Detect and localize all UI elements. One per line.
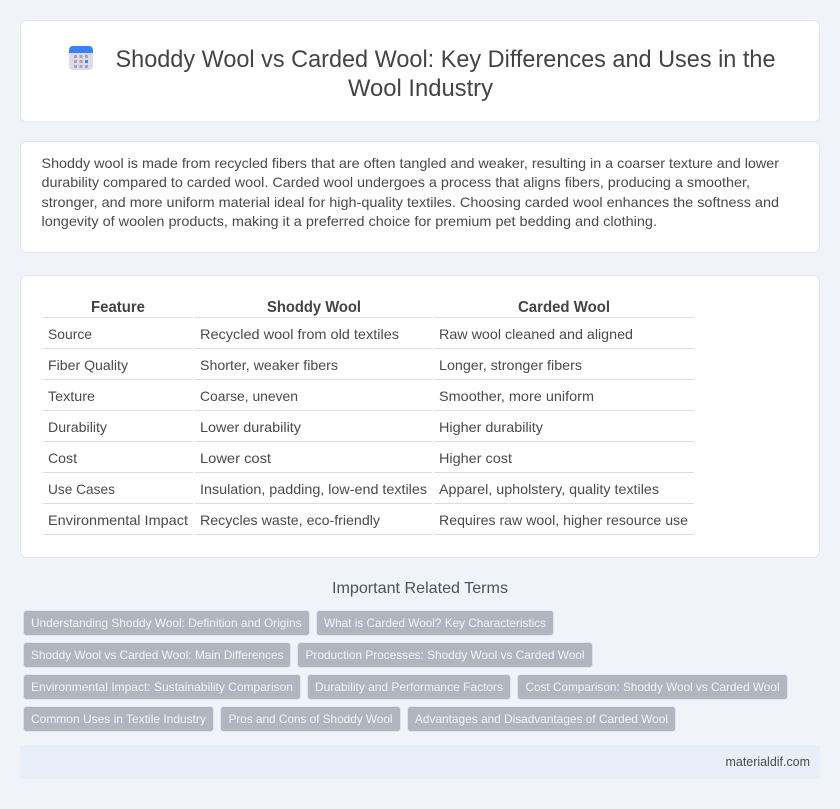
panel: comparison table xyxy=(20,276,820,558)
table row: fiber quality: Longer, stronger fibers xyxy=(439,357,582,373)
table row: cost xyxy=(48,450,512,466)
tag xyxy=(298,642,592,668)
footer source text: materialdif.com xyxy=(726,754,810,769)
text block: introduction: longevity of woolen products, making it a preferred choice for premium pet bedding and clothing. xyxy=(42,213,657,229)
table row: environmental impact: Requires raw wool, higher resource use xyxy=(439,512,688,528)
table row: texture: Texture xyxy=(48,388,95,404)
table row: texture: Smoother, more uniform xyxy=(439,388,594,404)
table row: use cases: Apparel, upholstery, quality textiles xyxy=(439,481,659,497)
tag xyxy=(316,610,554,636)
tag: Cost Comparison: Shoddy Wool vs Carded Wool xyxy=(526,680,780,694)
tag: What is Carded Wool? Key Characteristics xyxy=(324,616,546,630)
tag xyxy=(24,610,310,636)
tag xyxy=(220,706,400,732)
footer xyxy=(20,745,820,779)
table row: cost: Cost xyxy=(48,450,77,466)
table row: durability: Durability xyxy=(48,419,107,435)
table row: texture xyxy=(48,388,594,404)
table row: durability: Lower durability xyxy=(200,419,301,435)
table row: texture: Coarse, uneven xyxy=(200,388,298,404)
tag xyxy=(518,674,788,700)
table row: cost: Higher cost xyxy=(439,450,512,466)
tag: Common Uses in Textile Industry xyxy=(31,712,206,726)
table header: Carded Wool xyxy=(518,299,610,316)
text block: introduction: stronger, and more uniform material ideal for high-quality textiles. Choosing carded wool enhances the softness and xyxy=(42,194,779,210)
table row: environmental impact: Environmental Impact xyxy=(48,512,188,528)
text block: introduction: durability compared to carded wool. Carded wool undergoes a process that aligns fibers, producing a smoother, xyxy=(42,174,750,190)
panel: introduction xyxy=(20,142,820,252)
table row: source: Raw wool cleaned and aligned xyxy=(439,326,633,342)
table row: environmental impact: Recycles waste, eco-friendly xyxy=(200,512,380,528)
title: Wool Industry xyxy=(348,75,493,102)
table row: environmental impact xyxy=(48,512,688,528)
tag xyxy=(24,706,214,732)
tag: Environmental Impact: Sustainability Comparison xyxy=(31,680,293,694)
tag: Pros and Cons of Shoddy Wool xyxy=(228,712,392,726)
table header xyxy=(91,299,610,316)
heading: important related terms: Important Related Terms xyxy=(332,580,508,597)
table row: fiber quality: Shorter, weaker fibers xyxy=(200,357,338,373)
tag: Production Processes: Shoddy Wool vs Carded Wool xyxy=(306,648,584,662)
table row: source: Source xyxy=(48,326,92,342)
table row: source xyxy=(48,326,633,342)
tag: Advantages and Disadvantages of Carded Wool xyxy=(415,712,668,726)
tag xyxy=(24,642,290,668)
table row: durability: Higher durability xyxy=(439,419,543,435)
table row: use cases: Use Cases xyxy=(48,481,115,497)
tag xyxy=(24,674,300,700)
tag: Shoddy Wool vs Carded Wool: Main Differences xyxy=(31,648,284,662)
table header: Shoddy Wool xyxy=(267,299,361,316)
table header: Feature xyxy=(91,299,145,316)
table row: fiber quality xyxy=(48,357,582,373)
table row: fiber quality: Fiber Quality xyxy=(48,357,128,373)
table row: source: Recycled wool from old textiles xyxy=(200,326,399,342)
panel: header xyxy=(20,20,820,122)
text block: introduction: Shoddy wool is made from recycled fibers that are often tangled and weaker, resulting in a coarser texture and lower xyxy=(42,155,779,171)
table row: use cases: Insulation, padding, low-end textiles xyxy=(200,481,427,497)
table row: durability xyxy=(48,419,543,435)
tag xyxy=(308,674,510,700)
icon: calendar xyxy=(69,46,93,70)
tag: Durability and Performance Factors xyxy=(315,680,503,694)
tag: Understanding Shoddy Wool: Definition and Origins xyxy=(31,616,302,630)
title: Shoddy Wool vs Carded Wool: Key Differences and Uses in the xyxy=(116,46,776,73)
text block: introduction xyxy=(42,155,779,229)
table row: cost: Lower cost xyxy=(200,450,271,466)
tag xyxy=(408,706,676,732)
tag list: related terms xyxy=(24,610,788,732)
title xyxy=(116,46,776,102)
table row: use cases xyxy=(48,481,659,497)
